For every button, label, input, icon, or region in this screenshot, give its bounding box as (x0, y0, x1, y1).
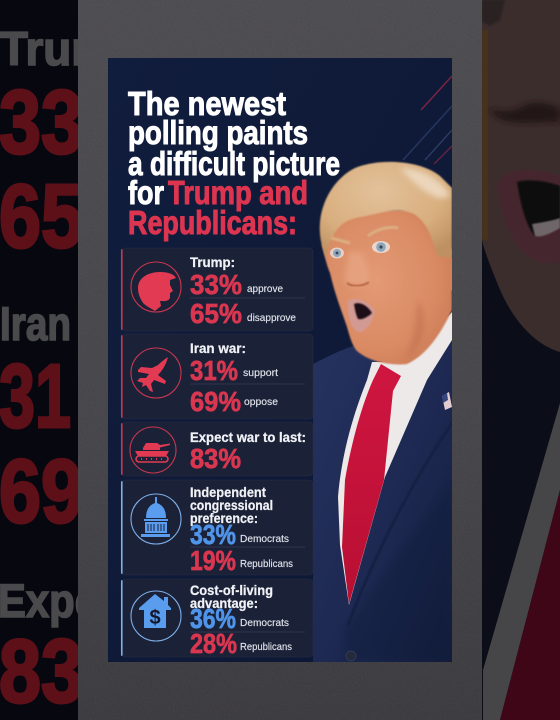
title: a difficult picture (128, 145, 340, 182)
left blurred strip: Iran (0, 297, 71, 350)
card: independent congressional preference: preference: (190, 510, 258, 526)
card: independent congressional preference (121, 480, 313, 576)
card: Iran war: 31% (190, 355, 238, 386)
decorative diagonal lines (403, 76, 452, 164)
left blurred strip (0, 0, 78, 720)
card: Iran war: Iran war: (190, 340, 246, 356)
card: Iran war (121, 334, 313, 419)
title: The newest (128, 85, 286, 122)
icon: tank (130, 427, 176, 473)
icon: fighter jet (131, 348, 181, 398)
card: Trump approval: 65% (190, 298, 242, 329)
card: war duration (121, 422, 313, 476)
left blurred strip: 83 (0, 622, 83, 720)
title: Trump and (168, 174, 308, 211)
card: cost-of-living advantage: Republicans (240, 641, 292, 653)
jacket (313, 330, 452, 662)
card: Iran war: support (243, 367, 278, 379)
card: Trump approval: disapprove (247, 312, 296, 324)
hair highlight (400, 168, 450, 198)
right zoomed portrait strip (482, 0, 560, 720)
card: independent congressional preference: Republicans (240, 558, 293, 570)
infographic panel (108, 58, 452, 662)
left blurred strip: 33 (0, 73, 83, 173)
card: cost-of-living advantage: Democrats (240, 617, 289, 629)
title (128, 85, 340, 241)
card: independent congressional preference: Independent (190, 484, 266, 500)
card: cost-of-living advantage: 28% (190, 628, 237, 659)
card: cost-of-living advantage: Cost-of-living (190, 582, 273, 598)
lapel seams (348, 423, 452, 625)
portrait illustration (313, 162, 452, 662)
eyes (330, 241, 390, 258)
nose (345, 252, 370, 286)
ear (451, 258, 452, 290)
card: Trump approval: 33% (190, 269, 242, 300)
left blurred strip: 31 (0, 347, 71, 447)
icon: house with dollar sign (131, 591, 181, 641)
card: Trump approval: Trump: (190, 254, 235, 270)
left blurred strip: Expe (0, 574, 98, 627)
left blurred strip: 65 (0, 167, 83, 267)
card: cost-of-living advantage: advantage: (190, 595, 258, 611)
face (322, 210, 452, 364)
card: war duration: 83% (190, 443, 241, 474)
card: independent congressional preference: 33% (190, 519, 236, 550)
mouth (348, 299, 375, 332)
card: cost-of-living advantage: 36% (190, 603, 236, 634)
card: independent congressional preference: Democrats (240, 533, 289, 545)
card: Trump approval: approve (247, 283, 283, 295)
title: for (128, 174, 164, 211)
card: independent congressional preference: 19% (190, 545, 236, 576)
necktie (342, 364, 401, 604)
shirt and collar (338, 312, 452, 605)
card: Iran war: oppose (244, 396, 278, 408)
card: independent congressional preference: congressional (190, 497, 273, 513)
icon: capitol (131, 494, 181, 544)
left blurred strip: 69 (0, 442, 83, 542)
hair (320, 162, 452, 258)
eyebrows (331, 227, 398, 243)
card: Trump approval (121, 248, 313, 331)
icon: house with dollar sign: $ (149, 607, 161, 629)
title: Republicans: (128, 204, 297, 241)
card: war duration: Expect war to last: (190, 429, 306, 445)
cheek shade (411, 306, 424, 350)
flag pin (442, 392, 452, 410)
left blurred strip: Trum (0, 22, 112, 75)
button (346, 651, 356, 661)
title: polling paints (128, 114, 308, 151)
icon: Trump silhouette (131, 262, 181, 312)
card: cost-of-living advantage (121, 579, 313, 659)
card: Iran war: 69% (190, 386, 241, 417)
